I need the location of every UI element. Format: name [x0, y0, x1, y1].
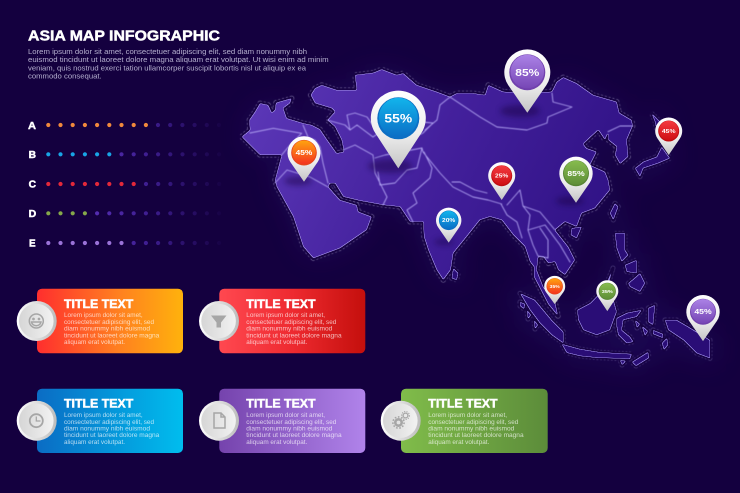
- pin: 35% green: [596, 280, 618, 311]
- row D: 4 of 15: D: [29, 209, 36, 220]
- title: ASIA MAP INFOGRAPHIC: [28, 28, 220, 44]
- card: blue: aliquam erat volutpat.: [64, 439, 125, 446]
- intro text block: euismod tincidunt ut laoreet dolore magna aliquam erat volutpat. Ut wisi enim ad minim: [28, 55, 329, 64]
- map of Asia: [242, 69, 710, 366]
- card: blue: Lorem ipsum dolor sit amet,: [64, 412, 143, 419]
- icon: document: [214, 413, 225, 428]
- card: red: tincidunt ut laoreet dolore magna: [246, 332, 342, 339]
- pin: 85% purple: 85%: [515, 68, 539, 79]
- icon: smiley: [29, 314, 43, 328]
- icon: gears: [393, 412, 409, 428]
- pin: 35% orange: 35%: [550, 284, 560, 289]
- pin: 45% purple: 45%: [694, 309, 713, 316]
- pin: 85% purple: [500, 49, 550, 117]
- card: red: TITLE TEXT: [246, 298, 316, 311]
- card: orange: tincidunt ut laoreet dolore magna: [64, 332, 160, 339]
- pin: 20%: 20%: [442, 218, 455, 224]
- card: green: Lorem ipsum dolor sit amet,: [428, 412, 507, 419]
- card: orange: Lorem ipsum dolor sit amet,: [64, 312, 143, 319]
- pin: 25% red: 25%: [495, 174, 508, 180]
- card: purple: Lorem ipsum dolor sit amet,: [246, 412, 325, 419]
- card: purple: aliquam erat volutpat.: [246, 439, 307, 446]
- row C: 8 of 15: C: [29, 180, 36, 191]
- card: green: TITLE TEXT: [428, 398, 498, 411]
- dot rating chart: [28, 121, 225, 250]
- row B: 6 of 15: B: [29, 150, 36, 161]
- card: red: diam nonummy nibh euismod: [246, 326, 333, 333]
- country borders: [250, 93, 633, 262]
- card: green: diam nonummy nibh euismod: [428, 426, 515, 432]
- card: blue: [17, 389, 183, 453]
- pin: 55%: [368, 91, 426, 173]
- card: blue: tincidunt ut laoreet dolore magna: [64, 432, 160, 439]
- card: orange: aliquam erat volutpat.: [64, 339, 125, 346]
- card: purple: [199, 389, 365, 453]
- icon: clock: [30, 414, 43, 427]
- pin: 45% orange: 45%: [296, 150, 313, 157]
- row A: 9 of 15: A: [28, 121, 36, 132]
- pin: 85% green: [556, 157, 593, 206]
- card: red: [199, 289, 365, 353]
- pin: 25% red: [488, 162, 515, 200]
- card: blue: TITLE TEXT: [64, 398, 133, 411]
- card: purple: consectetuer adipiscing elit, sed: [246, 419, 337, 426]
- pin: 45% purple: [686, 295, 720, 341]
- icon: funnel: [211, 316, 226, 328]
- card: green: tincidunt ut laoreet dolore magna: [428, 432, 524, 439]
- intro text block: [28, 47, 329, 80]
- card: orange: consectetuer adipiscing elit, sed: [64, 319, 154, 326]
- intro text block: Lorem ipsum dolor sit amet, consectetuer adipiscing elit, sed diam nonummy nibh: [28, 47, 307, 56]
- pin: 45% orange: [284, 136, 320, 186]
- card: blue: consectetuer adipiscing elit, sed: [64, 419, 154, 426]
- intro text block: veniam, quis nostrud exerci tation ullamcorper suscipit lobortis nisl ut aliquip ex ea: [28, 63, 306, 72]
- card: orange: diam nonummy nibh euismod: [64, 326, 150, 333]
- card: purple: tincidunt ut laoreet dolore magna: [246, 432, 342, 439]
- card: green: [381, 389, 548, 453]
- card: orange: [17, 289, 183, 353]
- pin: 55%: 55%: [384, 112, 413, 126]
- pin: 45% red: [655, 118, 682, 155]
- pin: 35% green: 35%: [602, 289, 613, 294]
- pin: 35% orange: [544, 276, 565, 304]
- card: green: aliquam erat volutpat.: [428, 439, 489, 446]
- row E: 7 of 15: E: [29, 239, 36, 250]
- card: red: aliquam erat volutpat.: [246, 339, 307, 346]
- card: red: Lorem ipsum dolor sit amet,: [246, 312, 325, 319]
- pin: 20%: [434, 208, 461, 246]
- card: red: consectetuer adipiscing elit, sed: [246, 319, 337, 326]
- intro text block: commodo consequat.: [28, 71, 102, 80]
- pin: 85% green: 85%: [567, 171, 586, 178]
- card: green: consectetuer adipiscing elit, sed: [428, 419, 519, 426]
- card: orange: TITLE TEXT: [64, 298, 133, 311]
- card: purple: diam nonummy nibh euismod: [246, 426, 333, 432]
- card: blue: diam nonummy nibh euismod: [64, 426, 150, 432]
- pin: 45% red: 45%: [662, 129, 676, 135]
- card: purple: TITLE TEXT: [246, 398, 316, 411]
